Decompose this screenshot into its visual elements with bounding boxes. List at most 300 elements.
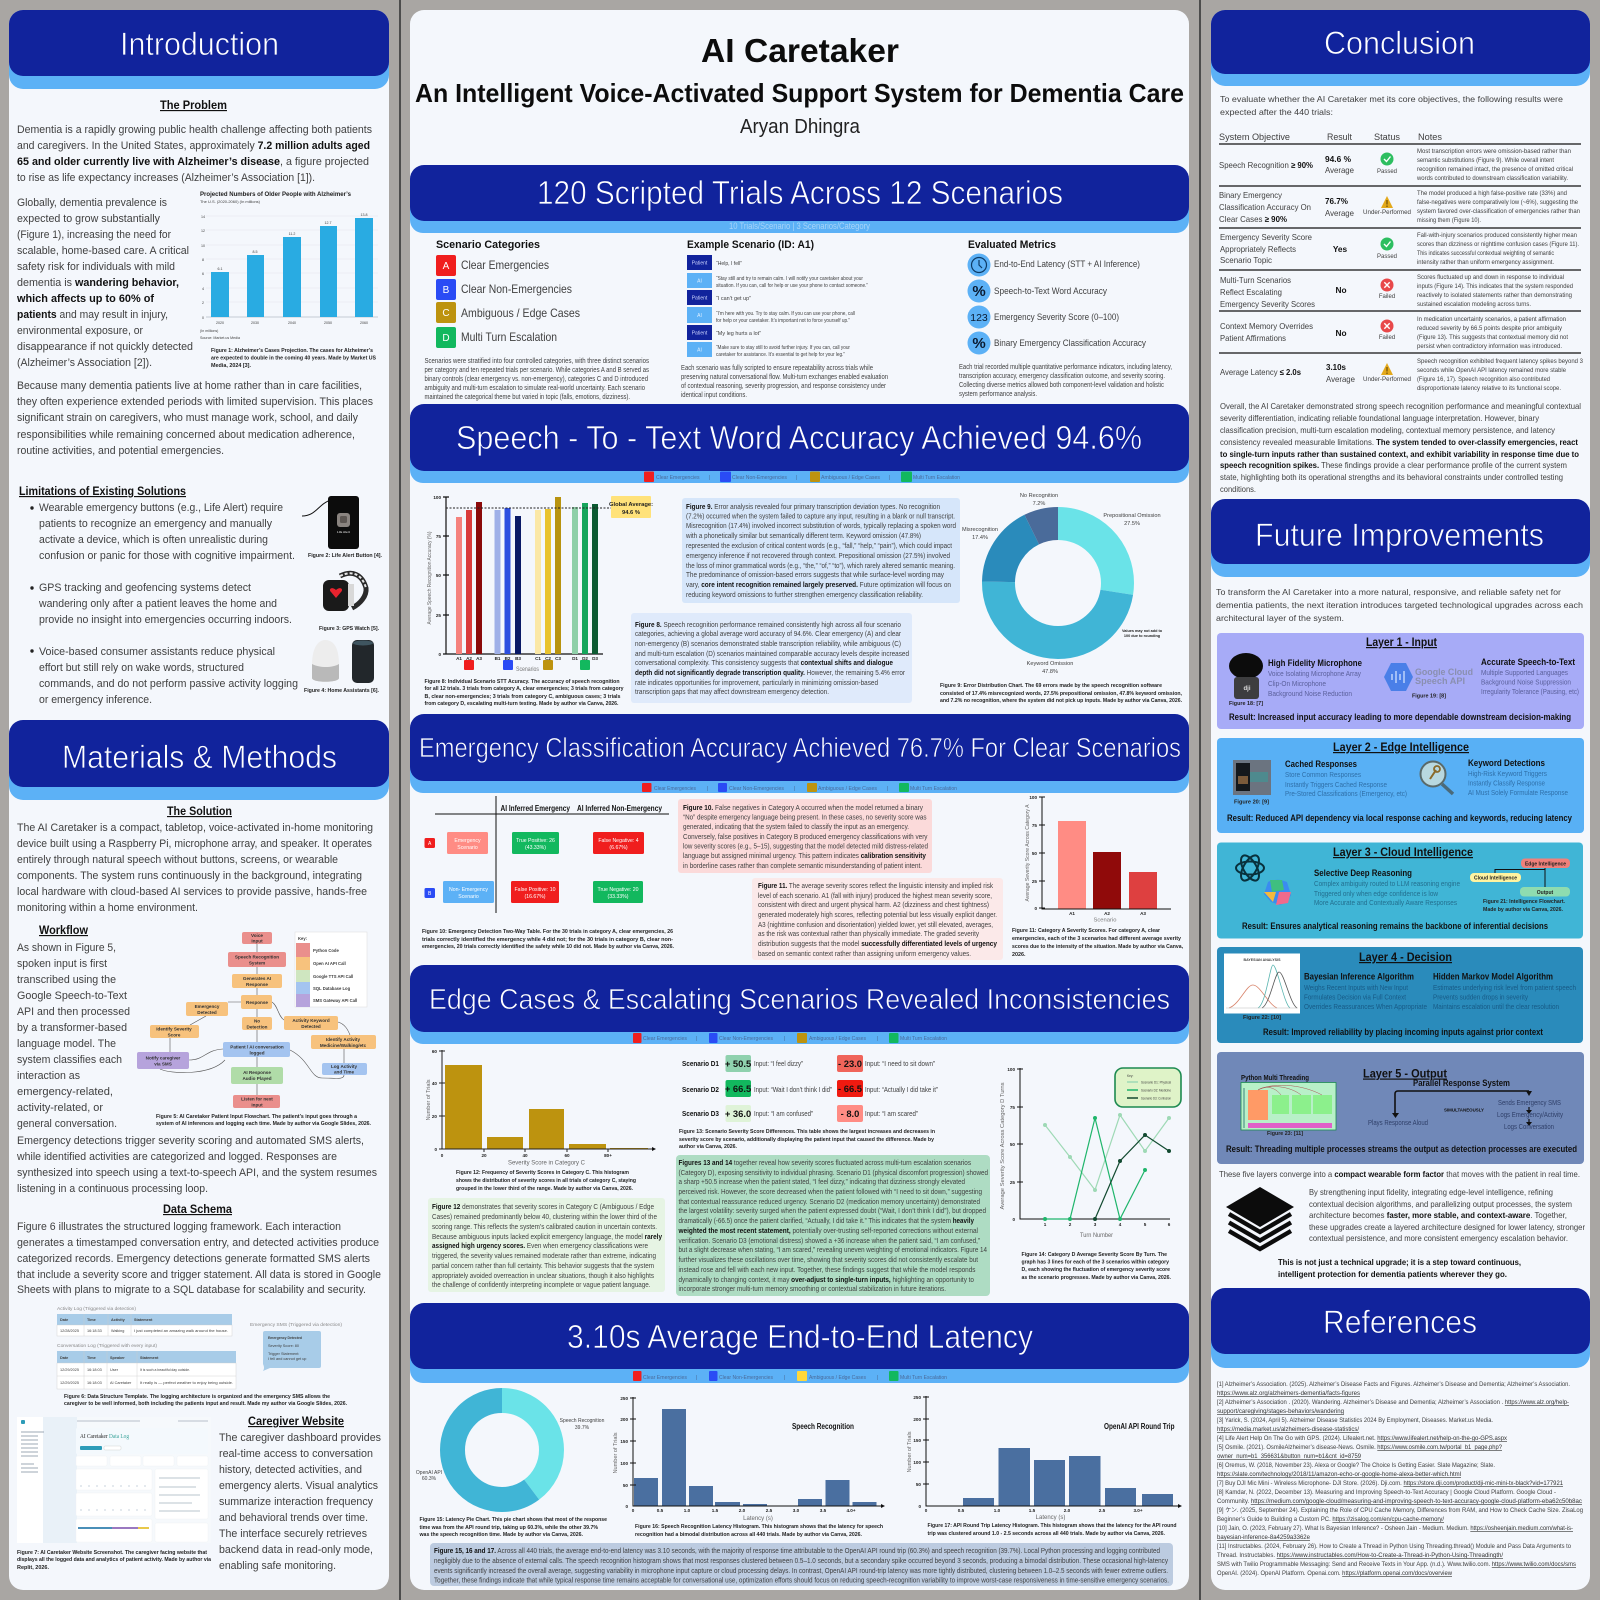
text block: scripted: of contextual reasoning, severity progression, and response consistency under <box>681 383 887 390</box>
text box: latency analysis <box>430 1543 1173 1586</box>
legend: scenario colors: Clear Non-Emergencies <box>719 1375 773 1381</box>
histogram: figure 12: 40 <box>432 1081 437 1086</box>
row: speech recognition: words contributed to downstream classification variability. <box>1416 175 1568 182</box>
icon: numbers <box>968 306 990 328</box>
row: multi-turn: Scores fluctuated up and down in response to individual <box>1417 274 1564 281</box>
row: binary classification: Clear Cases ≥ 90% <box>1219 214 1288 224</box>
text block: problem statement: and caregivers. In the United States, approximately 7.2 million adults aged <box>17 140 370 152</box>
reference list: Beginner’s Guide to Building a Custom PC. https://zisalog.com/en/cpu-cache-memory/ <box>1217 1516 1444 1523</box>
evaluated metrics <box>968 239 1146 354</box>
author: Aryan Dhingra <box>740 116 861 138</box>
flowchart: figure 5: AI Response <box>243 1070 271 1075</box>
histogram: figure 16: 0.5 <box>657 1508 664 1513</box>
bar chart: figure 8: C3 <box>555 656 561 661</box>
text block: global prevalence: dementia is wandering behavior, <box>17 277 179 289</box>
reference list: [2] Alzheimer’s Association . (2020). Wandering. Alzheimer’s Disease and Dementia; Alzheimer’s Association . https://www.alz.org/help- <box>1217 1399 1569 1406</box>
subheading: The Problem: The Problem <box>160 100 227 112</box>
histogram: figure 17: 1.0 <box>994 1508 1001 1513</box>
donut chart: figure 9 errors: 17.4% <box>972 535 988 541</box>
bar chart: figure 8: C1 <box>535 656 541 661</box>
flowchart: figure 5: No <box>254 1018 260 1024</box>
text box: figure 11 analysis: as the risk was contextual rather than physically immediate. The graded severity <box>758 931 979 938</box>
text block: workflow continued: listening in a continuous processing loop. <box>17 1183 208 1195</box>
text block: workflow: language model. The <box>17 1038 116 1050</box>
table: figure 6 data structure: Conversation Log (Triggered with every input) <box>57 1343 158 1348</box>
bullet list: limitations: patients to recognize an emergency and manually <box>39 518 273 530</box>
icon: layered stack <box>1226 1187 1294 1249</box>
bar chart: figure 11: 100 <box>1029 795 1037 800</box>
subheading: Workflow: Workflow <box>39 925 88 937</box>
bar chart: Alzheimer's projection <box>200 191 378 340</box>
table: figure 13 severity differences: + 36.0 <box>725 1108 751 1119</box>
section: scripted trials <box>410 165 1189 401</box>
text block: future intro: dementia patients, the next iteration introduces targeted technological upgrades across each <box>1216 600 1583 610</box>
bar chart: figure 8: 0 <box>438 652 441 657</box>
text block: data schema <box>17 1221 381 1296</box>
panel: layer 4 decision: Weighs Recent Inputs with New Input <box>1304 983 1408 992</box>
panel: layer 2 edge intelligence: Store Common Responses <box>1285 770 1361 779</box>
table: figure 6 data structure: It is such a beautiful day outside. <box>140 1368 190 1372</box>
caption: figure 8: Figure 8: Individual Scenario STT Acuracy. The accuracy of speech recognition <box>424 679 620 685</box>
caption: figure 4: Figure 4: Home Assistants [6]. <box>304 688 379 694</box>
subheading: The Solution: The Solution <box>167 806 232 818</box>
text block: workflow: system classifies each <box>17 1054 122 1066</box>
text block: global prevalence: disappearance if not quickly detected <box>17 341 193 353</box>
heading: Latency: 3.10s Average End-to-End Latency <box>567 1318 1033 1355</box>
row: latency: disproportionate latency relative to its functional scope. <box>1417 385 1561 392</box>
panel: layer 5 output: Logs Conversation <box>1504 1122 1554 1131</box>
text block: conclusion intro <box>1220 94 1563 117</box>
caption: figure 1 <box>211 348 376 369</box>
text block: global prevalence: expected to grow substantially <box>17 213 161 225</box>
text block: workflow: Google Speech-to-Text <box>17 990 127 1002</box>
caption: figure 13: Figure 13: Scenario Severity Score Differences. This table shows the largest increases and decreases in <box>679 1129 936 1135</box>
bullet list: limitations: or emergency inference. <box>39 694 152 706</box>
panel: layer 4 decision: Formulates Decision via Full Context <box>1304 992 1406 1002</box>
legend: line key: Scenario D3: Confusion <box>1141 1096 1171 1100</box>
legend: scenario colors: Clear Emergencies <box>643 1036 687 1042</box>
legend: line key <box>1115 1068 1181 1107</box>
legend: flowchart key: SQL Database Log <box>313 986 351 991</box>
reference list: [9] ケン. (2025, September 24). Explaining the Role of CPU Cache Memory, Differences from RAM, and How to Check Cache Size. ZisaLog <box>1217 1507 1584 1514</box>
bullet list: limitations: Wearable emergency buttons (e.g., Life Alert) require <box>39 502 283 514</box>
bar chart: Alzheimer's projection: Projected Numbers of Older People with Alzheimer’s <box>200 191 352 198</box>
scenario categories: A <box>443 261 450 272</box>
table: figure 10 two-way: Scenario <box>457 845 478 851</box>
section: latency <box>410 1303 1189 1586</box>
icon: life alert button <box>302 496 359 549</box>
icon: life alert button: Life Alert <box>337 530 350 534</box>
text block: conclusion intro: expected after the 440 trials: <box>1220 107 1333 117</box>
legend: line key: Scenario D2: Medicine <box>1141 1088 1171 1092</box>
flowchart: figure 21 intelligence: Edge Intelligence <box>1525 862 1566 868</box>
text block: future intro <box>1216 587 1583 623</box>
row: multi-turn: Reflect Escalating <box>1220 287 1282 297</box>
bar chart: Alzheimer's projection: 2030 <box>251 321 259 325</box>
row: binary classification: false-negatives were comparatively low (~6%), suggesting the <box>1417 199 1578 206</box>
line chart: figure 14: 1 <box>1044 1222 1047 1227</box>
row: binary classification: Binary Emergency <box>1219 190 1283 200</box>
flowchart: figure 5 <box>137 932 376 1108</box>
histogram: figure 17: 250 <box>913 1395 921 1400</box>
bar chart: figure 11: 25 <box>1032 879 1037 884</box>
evaluated metrics: End-to-End Latency (STT + AI Inference) <box>994 259 1140 269</box>
text block: future intro: architectural layer of the system. <box>1216 613 1344 623</box>
line chart: figure 14 <box>1000 1067 1181 1239</box>
panel: layer 4 decision <box>1217 947 1583 1043</box>
row: multi-turn: Multi-Turn Scenarios <box>1220 275 1291 285</box>
text box: figure 8 analysis: non-emergency (B) scenarios demonstrated stable transcription reliability, while ambiguous (C) <box>635 641 901 648</box>
caption: figure 11: Figure 11: Category A Severity Scores. For category A, clear <box>1012 928 1161 934</box>
legend: scenario colors: Clear Emergencies <box>656 475 700 481</box>
histogram: figure 17: 0.5 <box>958 1508 965 1513</box>
caption: figure 14: D, each showing the fluctuation of emergency severity score <box>1022 1267 1170 1273</box>
table: figure 10 two-way: True Positive: 26 <box>516 838 555 844</box>
panel: layer 2 edge intelligence: Instantly Classify Response <box>1468 778 1545 788</box>
scenario categories: Multi Turn Escalation <box>461 330 557 344</box>
legend: scenario colors: | <box>696 1036 698 1042</box>
histogram: figure 12: Severity Score in Category C <box>508 1160 585 1166</box>
row: multi-turn: Failed <box>1379 294 1395 300</box>
reference list: Thread. Instructables. https://www.instructables.com/How-to-Create-a-Thread-in-Python-Using-Threadingth/ <box>1217 1552 1503 1559</box>
legend: scenario colors: Ambiguous / Edge Cases <box>821 475 880 481</box>
bar chart: Alzheimer's projection: 2 <box>202 301 204 305</box>
table: figure 6 data structure: Speaker <box>110 1356 125 1360</box>
bar chart: Alzheimer's projection: 13.8 <box>360 213 368 217</box>
bar chart: figure 8: B2 <box>505 656 511 661</box>
diagram: python threading <box>1241 1082 1336 1130</box>
panel: layer 5 output: Figure 23: [11] <box>1267 1131 1303 1137</box>
panel: layer 5 output <box>1217 1052 1584 1164</box>
reference list: [7] Buy DJI Mic Mini - Wireless Microphone- DJI Store. (2026). Dji.com. https://store.dji.com/product/dji-mic-mini-tx-black?vid=177921 <box>1217 1480 1564 1487</box>
flowchart: figure 5: and Time <box>334 1070 354 1074</box>
table: figure 6 data structure: 12/28/2025 <box>60 1329 79 1333</box>
row: severity score: Appropriately Reflects <box>1220 244 1296 254</box>
table: figure 10 two-way: False Positive: 10 <box>515 887 556 893</box>
text box: figure 10 analysis: Figure 10. False negatives in Category A occurred when the model returned a binary <box>683 805 923 812</box>
caption: figure 10: Figure 10: Emergency Detection Two-Way Table. For the 30 trials in category A, clear emergencies, 26 <box>422 929 673 935</box>
caption: figure 12 <box>456 1170 637 1192</box>
legend: scenario colors: | <box>877 1036 879 1042</box>
text box: figure 9 analysis: The predominance of omission-based errors suggests that while surface-level wording may <box>686 572 944 579</box>
donut chart: figure 9 errors <box>962 493 1163 675</box>
legend: scenario colors: Clear Emergencies <box>643 1375 687 1381</box>
table: figure 10 two-way: (6.67%) <box>609 845 628 851</box>
text block: workflow continued: while identified activities are categorized and logged. Responses are <box>16 1151 337 1163</box>
caption: figure 8: from category D, escalating multi-turn testing. Made by author via Canva, 2026. <box>424 701 619 707</box>
panel: layer 5 output: Parallel Response System <box>1413 1078 1510 1089</box>
text block: caregiver strain: routine activities, and potential emergencies. <box>17 445 224 457</box>
bar chart: figure 8: D1 <box>572 656 578 661</box>
text block: workflow: by a transformer-based <box>17 1022 127 1034</box>
text block: scenario design: binary controls (clear emergency vs. non-emergency), categories C and D introduced <box>424 376 648 383</box>
caption: figure 17: Figure 17: API Round Trip Latency Histogram. This histogram shows that the latency for the API round <box>928 1523 1177 1529</box>
text block: workflow: general conversation. <box>17 1118 117 1130</box>
table: figure 6 data structure: AI Caretaker <box>110 1381 132 1385</box>
bullet list: limitations: activate a device, which is often unrealistic during <box>39 534 268 546</box>
text block: caregiver strain: responsibilities while remaining concerned about medication adherence, <box>17 429 355 441</box>
evaluated metrics: Evaluated Metrics <box>968 239 1056 251</box>
legend: scenario colors: | <box>784 1375 786 1381</box>
text box: figures 13 and 14 analysis: but a slight decrease when stating, “I am scared,” revealing uneven weighting of emotional indicators. Figure 14 <box>678 1247 987 1254</box>
reference list: https://media.market.us/alzheimers-disease-statistics/ <box>1217 1426 1359 1433</box>
text block: scenario design <box>424 358 649 401</box>
donut chart: figure 9 errors: No Recognition <box>1020 493 1058 499</box>
reference list: [11] Instructables. (2024, February 26). How to Create a Thread in Python Using Threading.thread() Module and Pass Data Arguments to <box>1217 1543 1572 1550</box>
bullet list: limitations: GPS tracking and geofencing systems detect <box>39 582 251 594</box>
text block: solution: monitoring within a home environment. <box>17 902 198 914</box>
bar chart: figure 8: A1 <box>456 656 462 661</box>
table: figure 13 severity differences: + 50.5 <box>725 1058 751 1069</box>
example scenario: AI <box>697 313 702 319</box>
table: figure 10 two-way: Scenario <box>458 894 479 900</box>
text block: data schema: categorized records. Emergency detections generate formatted SMS alerts <box>17 1253 371 1265</box>
text block: global prevalence: (Figure 1), increasing the need for <box>17 229 171 241</box>
panel: layer 2 edge intelligence <box>1217 738 1584 833</box>
row: binary classification: 76.7% <box>1325 196 1349 206</box>
panel: layer 2 edge intelligence: Instantly Triggers Cached Response <box>1285 780 1387 789</box>
text block: conclusion summary: classification precision, multi-turn escalation modeling, contextual memory persistence, and latency <box>1220 425 1556 435</box>
text block: solution: device built using a Raspberry Pi, microphone array, and speaker. It operates <box>17 838 373 850</box>
heading: Emergency Classification <box>410 714 1189 793</box>
row: context memory: No <box>1335 328 1347 338</box>
flowchart: figure 5: input <box>251 1102 263 1108</box>
text box: figure 12 analysis: partial concern rather than full certainty. This behavior suggests that the system <box>432 1263 654 1270</box>
icon: GPS watch <box>323 573 366 611</box>
table: figure 10 two-way: Emergency <box>454 838 481 844</box>
text block: caregiver website <box>219 1432 382 1572</box>
caption: figure 11: scores due to the intensity of the situation. Made by author via Canva, <box>1012 944 1183 950</box>
heading: Speech-to-Text <box>410 404 1189 483</box>
section: Materials & Methods <box>9 720 389 1572</box>
text block: solution: entirely through natural speech without buttons, screens, or wearable <box>17 854 338 866</box>
text box: figure 11 analysis: consistent with direct and urgent physical harm. A2 (dizziness and chest tightness) <box>758 902 989 909</box>
screenshot: figure 7 caregiver website: AI Caretaker Data Log <box>80 1433 130 1440</box>
row: context memory: Context Memory Overrides <box>1220 321 1313 331</box>
table: figure 6 data structure: 16:18:03 <box>87 1381 102 1385</box>
heading: 120 Scripted Trials: 10 Trials/Scenario | 3 Scenarios/Category <box>729 221 870 232</box>
text block: solution: local hardware with cloud-based AI services to provide passive, hands-free <box>17 886 367 898</box>
caption: figure 15: Figure 15: Latency Pie Chart. This pie chart shows that most of the response <box>420 1517 607 1523</box>
row: multi-turn: inputs (Figure 14). This indicates that the system responded <box>1417 283 1573 290</box>
flowchart: figure 5: Response <box>246 1000 268 1005</box>
text box: figures 13 and 14 analysis: (Category D), exposing sensitivity to individual phrasing. Scenario D1 (physical discomfort progression) showed <box>678 1170 988 1177</box>
text block: conclusion summary: to single-turn inputs rather than sustained context, and exhibit variability in response time due to <box>1220 449 1579 459</box>
text box: latency analysis: negligibly due to the absence of external calls. The speech recognition histogram shows that most responses clustered between 0.5–1.0 seconds, but a secondary spike occurred beyond 3 seconds, producing a bimodal distribution. These occasional high-latency <box>434 1558 1168 1565</box>
table: figure 6 data structure: Activity Log (Triggered via detection) <box>57 1306 137 1311</box>
text block: conclusion summary: consistency revealed measurable limitations. The system tended to over-classify emergencies, react <box>1220 437 1578 447</box>
panel: layer 2 edge intelligence: Layer 2 - Edge Intelligence <box>1333 740 1469 754</box>
legend: flowchart key: Google TTS API Call <box>313 974 353 979</box>
table: figure 13 severity differences: Input: “I am confused” <box>754 1109 814 1118</box>
icon: magnifying key <box>1420 762 1453 794</box>
legend: scenario colors: Clear Emergencies <box>654 786 696 792</box>
table: figure 6 data structure: 16:18:33 <box>87 1329 102 1333</box>
text box: figure 12 analysis: Cases) remained predominantly below 40, clustering within the lower third of the <box>432 1214 657 1221</box>
text box: latency analysis: Figure 15, 16 and 17. Across all 440 trials, the average end-to-end latency was 3.10 seconds, with the majority of response time attributable to the OpenAI API round trip (60.3%) and speech recognition (39.7%). Local Python processing and logging contributed <box>434 1548 1160 1555</box>
bar chart: figure 11: A2 <box>1104 911 1110 916</box>
example scenario: Patient <box>692 330 708 336</box>
text block: global prevalence <box>16 197 193 369</box>
histogram: figure 17: Latency (s) <box>1036 1515 1065 1521</box>
icon: numbers: 123 <box>970 312 988 324</box>
heading: 120 Scripted Trials: 120 Scripted Trials Across 12 Scenarios <box>537 174 1063 211</box>
histogram: figure 16: 50 <box>623 1483 628 1488</box>
text box: figure 9 analysis: vary, core intent recognition remained largely preserved. Future optimization will focus on <box>686 582 951 589</box>
text box: figure 8 analysis: depth did not significantly degrade transcription quality. However, the remaining 5.4% error <box>635 670 906 677</box>
section: Introduction <box>9 10 389 706</box>
text block: global prevalence: which affects up to 60% of <box>16 293 154 305</box>
caption: figure 1: Figure 1: Alzheimer’s Cases Projection. The cases for Alzheimer’s <box>211 348 373 354</box>
histogram: figure 16 <box>613 1396 885 1522</box>
table: figure 10 two-way: Non- Emergency <box>449 887 488 893</box>
text block: metrics <box>959 364 1172 398</box>
text box: figure 11 analysis: generated moderately high scores, reflecting potential but less visually explicit danger. <box>758 912 997 919</box>
donut chart: figure 15: 60.3% <box>422 1476 437 1482</box>
flowchart: figure 5: Detected <box>301 1024 321 1029</box>
text block: metrics: Collecting diverse metrics allowed both component-level validation and holistic <box>959 382 1164 389</box>
caption: figure 5: system of AI inferences and logging each time. Made by author via Google Slides, 2026. <box>156 1121 371 1127</box>
flowchart: figure 5: Score <box>168 1032 181 1038</box>
caption: figure 13 <box>679 1129 936 1150</box>
histogram: figure 16: 3.0 <box>793 1508 800 1513</box>
caption: figure 12: grouped in the lower third of the range. Made by author via Canva, 2026. <box>456 1186 633 1192</box>
table: figure 6 data structure: 12/29/2025 <box>60 1381 79 1385</box>
text block: workflow: activity-related, or <box>17 1102 103 1114</box>
section: Conclusion <box>1211 10 1590 494</box>
histogram: figure 16: 1.5 <box>712 1508 719 1513</box>
caption: figure 14: Figure 14: Category D Average Severity Score By Turn. The <box>1022 1252 1167 1258</box>
row: latency <box>1220 358 1583 392</box>
reference list: [10] Jain, O. (2023, February 27). What Is Bayesian Inference? - Osheen Jain - Medium. Medium. https://osheenjain.medium.com/what-is- <box>1217 1525 1573 1532</box>
bar chart: Alzheimer's projection: 4 <box>202 287 204 291</box>
flowchart: figure 5: Audio Played <box>242 1076 272 1081</box>
legend: scenario colors: | <box>784 1036 786 1042</box>
table: figure 6 data structure: Date <box>60 1318 68 1322</box>
row: severity score: Scenario Topic <box>1220 255 1272 265</box>
example scenario: “I’m here with you. Try to stay calm. If you can use your phone, call <box>716 311 855 317</box>
caption: figure 8 <box>424 679 624 707</box>
histogram: figure 17: 2.0 <box>1064 1508 1071 1513</box>
text box: figure 9 analysis: emergency inference if not recovered through context. Prepositional omission (27.5%) involved <box>686 553 950 560</box>
legend: scenario colors: | <box>887 786 889 792</box>
text box: figure 12 analysis: assigned high urgency scores. Even when emergency classifications were <box>432 1243 648 1250</box>
donut chart: figure 9 errors: Misrecognition <box>962 527 998 533</box>
table: figure 6 data structure: Time <box>87 1318 96 1322</box>
line chart: figure 14: 5 <box>1144 1222 1147 1227</box>
row: severity score: Emergency Severity Score <box>1220 232 1312 242</box>
example scenario: AI <box>697 348 702 354</box>
donut chart: figure 9 errors: 47.8% <box>1042 669 1058 675</box>
text block: data schema: Figure 6 illustrates the structured logging framework. Each interaction <box>17 1221 341 1233</box>
example scenario: Patient <box>692 260 708 266</box>
icon: percent <box>968 280 990 302</box>
caption: figure 11: emergencies, each of the 3 scenarios had different average sverity <box>1012 936 1182 942</box>
text block: conclusion summary <box>1220 401 1581 494</box>
text box: figure 8 analysis: and multi-turn escalation (D) scenarios maintained comparable accuracy levels despite increased <box>635 651 909 658</box>
histogram: figure 16: 0 <box>625 1504 628 1509</box>
text box: figure 10 analysis: low severity scores (e.g., 5–15), suggesting that the model detected mild distress-related <box>683 844 928 850</box>
panel: layer 1 input: Layer 1 - Input <box>1366 635 1437 649</box>
text block: metrics: Each trial recorded multiple quantitative performance indicators, including latency, <box>959 364 1172 371</box>
legend: scenario colors: Multi Turn Escalation <box>910 786 957 792</box>
histogram: figure 12: 20 <box>432 1114 437 1119</box>
table: figure 13 severity differences: - 23.0 <box>838 1058 862 1069</box>
line chart: figure 14: 50 <box>1010 1142 1015 1147</box>
bar chart: figure 8: A3 <box>476 656 482 661</box>
evaluated metrics: Speech-to-Text Word Accuracy <box>994 286 1107 296</box>
bar chart: Alzheimer's projection: 12.7 <box>324 221 332 225</box>
bar chart: Alzheimer's projection: 12 <box>201 229 205 233</box>
row: binary classification: Under-Performed <box>1363 210 1411 216</box>
text block: scenario design: per category and ten repeated trials per scenario. While categories A and B served as <box>424 367 649 374</box>
flowchart: figure 5: Detection <box>247 1024 268 1030</box>
caption: figure 10: emergencies, 20 trials correctly identified the safety while 10 did not. Made by author via Canva, 2026. <box>422 944 674 950</box>
table: figure 10 two-way: (33.33%) <box>607 894 629 900</box>
caption: figure 5 <box>156 1114 371 1127</box>
panel: layer 1 input: Irregularity Tolerance (Pausing, etc) <box>1481 687 1579 696</box>
title block <box>415 32 1184 138</box>
section: Future Improvements <box>1211 499 1590 1279</box>
histogram: figure 12: 0 <box>441 1153 444 1158</box>
panel: layer 2 edge intelligence: High-Risk Keyword Triggers <box>1468 769 1547 778</box>
flowchart: figure 5: Voice <box>251 933 263 938</box>
caption: figure 1: Media, 2024 [3]. <box>211 363 251 369</box>
text block: conclusion summary: speech recognition spikes. These findings provide a clear performance profile of the current system <box>1220 460 1567 470</box>
histogram: figure 17: 3.0+ <box>1133 1508 1143 1513</box>
table: figure 13 severity differences: + 66.5 <box>725 1083 751 1094</box>
table: figure 6 data structure: Walking <box>111 1329 124 1333</box>
row: speech recognition: Average <box>1325 165 1354 175</box>
heading: Speech-to-Text: Speech - To - Text Word Accuracy Achieved 94.6% <box>456 419 1142 456</box>
panel: layer 5 output: Logs Emergency/Activity <box>1497 1110 1563 1119</box>
legend: flowchart key: Python Code <box>313 948 339 953</box>
row: context memory: (Figure 13). This suggests that contextual memory did not <box>1417 334 1568 341</box>
text block: global prevalence: patients and may result in injury, <box>17 309 168 321</box>
panel: layer 3 cloud intelligence: Selective Deep Reasoning <box>1314 868 1412 879</box>
icon: percent: % <box>972 283 986 300</box>
chart: Bayesian analysis image <box>1224 954 1300 1014</box>
bar chart: figure 8: A2 <box>466 656 472 661</box>
scenario categories: Clear Non-Emergencies <box>461 282 572 296</box>
scenario categories: Clear Emergencies <box>461 258 549 272</box>
flowchart: figure 5: Listen for next <box>241 1096 273 1102</box>
legend: scenario colors <box>633 1033 947 1043</box>
text box: figure 10 analysis <box>678 799 932 873</box>
bar chart: Alzheimer's projection: 8 <box>202 258 204 262</box>
histogram: figure 16: 250 <box>620 1396 628 1401</box>
line chart: figure 14: 100 <box>1007 1067 1015 1072</box>
table: figure 13 severity differences: Input: “Wait I don’t think I did” <box>754 1085 833 1094</box>
text block: data schema: that include a severity score and trigger statement. All data is stored in Google <box>17 1269 381 1281</box>
text block: caregiver website: and behavioral trends over time. <box>219 1512 368 1524</box>
text block: conclusion intro: To evaluate whether the AI Caretaker met its core objectives, the following results were <box>1220 94 1563 104</box>
donut chart: figure 15: OpenAI API <box>416 1470 442 1476</box>
text box: figure 8 analysis: conversational complexity. This consistency suggests that contextual shifts and dialogue <box>635 660 893 667</box>
caption: figure 11: 2026. <box>1012 952 1026 958</box>
bar chart: figure 8: B1 <box>495 656 501 661</box>
reference list: support/caregiving/stages-behaviors/wandering <box>1217 1408 1345 1415</box>
text block: solution: The AI Caretaker is a compact, tabletop, voice-activated in-home monitoring <box>17 822 373 834</box>
text block: architecture summary: contextual decision algorithms, and parallelizing output processes, the system <box>1309 1199 1572 1209</box>
row: multi-turn: sustained escalation modeling across turns. <box>1417 301 1531 308</box>
bar chart: Alzheimer's projection: 2040 <box>288 321 296 325</box>
reference list: [4] Life Alert Help On The Go with GPS. (2024). Lifealert.net. https://www.lifealert.net/help-on-the-go-GPS.aspx <box>1217 1435 1508 1442</box>
text box: figure 9 analysis: (7.2%) occurred when the system failed to capture any input, resulting in a blank or null transcript. <box>686 514 955 520</box>
caption: figure 7: Replit, 2026. <box>17 1565 49 1571</box>
table: objectives results: Notes <box>1418 132 1443 142</box>
histogram: figure 12: 0 <box>434 1147 437 1152</box>
